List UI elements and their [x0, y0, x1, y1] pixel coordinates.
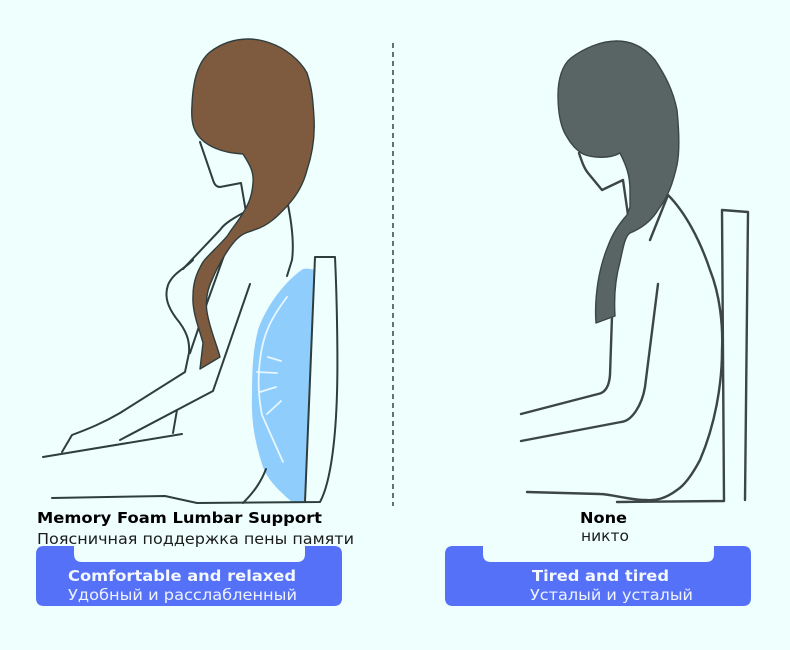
left subheading: Поясничная поддержка пены памяти: [37, 530, 354, 548]
right figure: no support: [521, 41, 748, 502]
left figure: with lumbar support: [43, 39, 337, 503]
left result banner: [36, 546, 342, 606]
right subheading: никто: [581, 527, 629, 545]
left result banner: Comfortable and relaxed: [68, 567, 296, 585]
brown hair: [192, 39, 314, 369]
chair back: [52, 257, 337, 503]
right result banner: Усталый и усталый: [530, 586, 693, 604]
divider: [392, 43, 394, 506]
right result banner: Tired and tired: [532, 567, 669, 585]
right heading: None: [580, 509, 627, 527]
grey hair: [558, 41, 679, 323]
lumbar cushion: [252, 269, 315, 502]
right result banner: [445, 546, 751, 606]
chair back: [617, 210, 748, 502]
left result banner: Удобный и расслабленный: [68, 586, 297, 604]
body outline: [43, 142, 293, 503]
left heading: Memory Foam Lumbar Support: [37, 509, 323, 527]
body outline: [521, 153, 722, 500]
